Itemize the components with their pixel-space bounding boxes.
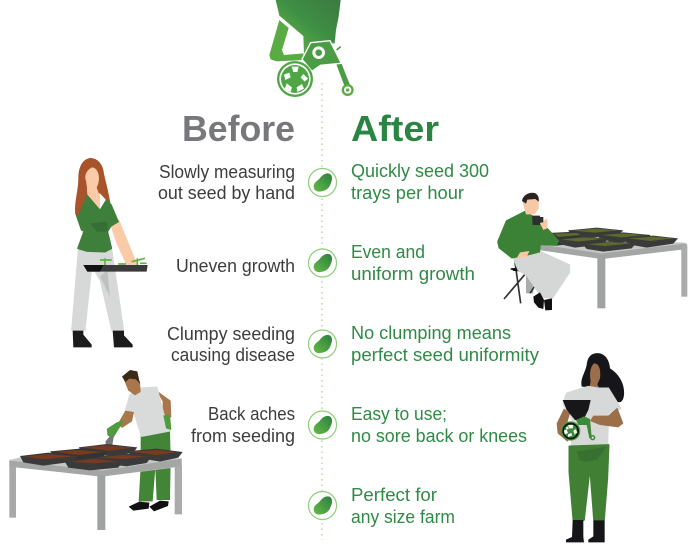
icon: bean 4 [308,411,336,439]
text: after items: perfect seed uniformity [351,345,539,365]
text: after items: no sore back or knees [351,426,527,446]
illustration: woman holding tray [72,158,148,347]
text: after items: Even and [351,242,425,262]
text: before items [158,162,295,446]
text: after items: trays per hour [351,183,464,203]
icon: bean 5 [308,492,336,520]
hair strand [75,180,87,216]
icon: bean 3 [308,330,336,358]
text: after items: uniform growth [351,264,475,284]
text: before items: causing disease [171,345,295,365]
heading: Before: Before [182,108,295,149]
text: after items: No clumping means [351,323,511,343]
heading: After: After [351,108,439,149]
illustration: man with trowel at table [9,370,183,530]
text: before items: from seeding [191,426,295,446]
text: before items: Clumpy seeding [167,324,295,344]
illustration: seated man with mug at table [498,193,687,310]
text: after items: Easy to use; [351,404,447,424]
text: before items: Uneven growth [176,256,295,276]
icon: bean 2 [308,249,336,277]
text: after items [351,161,539,527]
icon: seeder machine [269,0,354,97]
icon: bean 1 [308,168,336,196]
text: after items: any size farm [351,507,455,527]
text: before items: Slowly measuring [159,162,295,182]
center dotted line [321,83,323,540]
text: before items: out seed by hand [158,183,295,203]
illustration: woman holding seeder [557,353,624,542]
text: before items: Back aches [208,404,295,424]
text: after items: Quickly seed 300 [351,161,489,181]
text: after items: Perfect for [351,485,437,505]
